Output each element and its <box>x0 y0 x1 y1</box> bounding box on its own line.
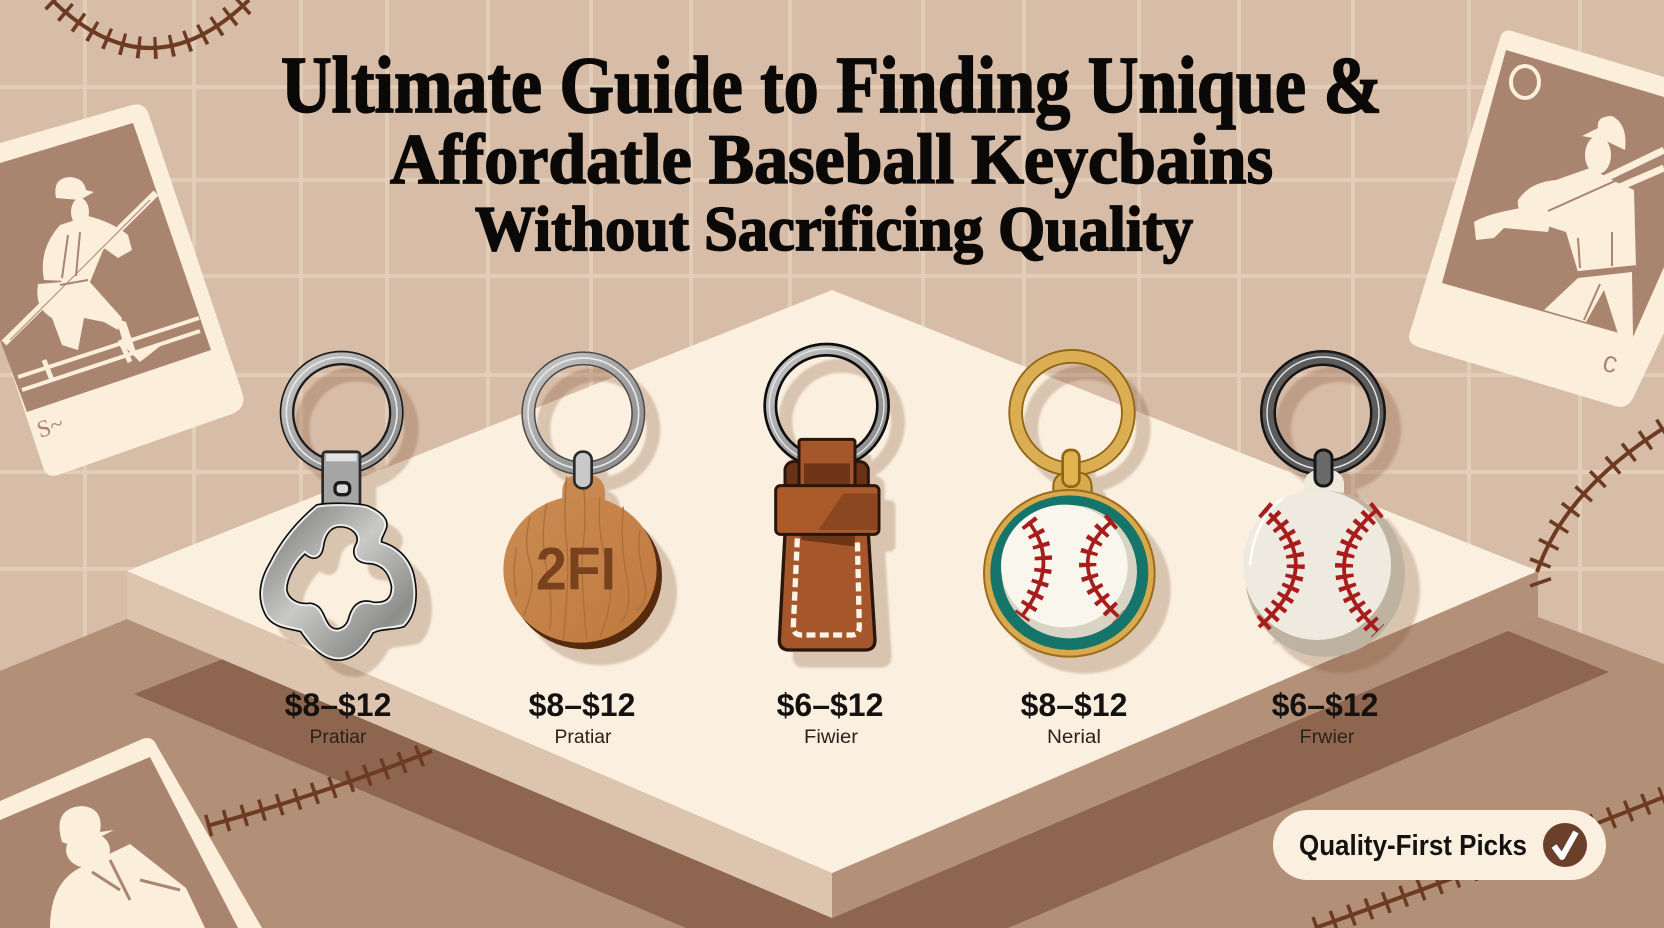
batter figure right <box>1474 116 1664 337</box>
keychain 5: plain baseball <box>1243 357 1405 657</box>
title: Ultimate Guide to Finding Unique & <box>281 42 1382 130</box>
metal clip <box>323 452 360 507</box>
check icon <box>1543 823 1587 867</box>
platform right side face <box>832 571 1538 918</box>
wood tab <box>562 475 605 503</box>
leather body <box>779 533 875 650</box>
platform left side face <box>127 571 832 918</box>
price 5: $6–$12 <box>1272 687 1378 723</box>
price 2: $8–$12 <box>529 687 635 723</box>
badge text: Quality-First Picks <box>1299 830 1527 862</box>
title <box>281 42 1382 264</box>
engraved text: 2FI <box>536 534 616 602</box>
ring clasp <box>574 452 592 488</box>
gold ring <box>1016 356 1128 469</box>
steel ring <box>528 358 639 469</box>
gold clasp <box>1063 450 1079 487</box>
leather band <box>776 486 879 534</box>
title: Without Sacrificing Quality <box>475 193 1193 264</box>
ball highlight <box>1001 505 1128 627</box>
disc face <box>503 496 657 643</box>
price 3: $6–$12 <box>777 687 883 723</box>
keychain 4: enamel baseball <box>984 356 1155 657</box>
green enamel ring <box>990 495 1148 650</box>
ring clasp <box>1315 450 1332 486</box>
baseball card right <box>1409 30 1664 407</box>
baseball card lower left <box>0 738 262 928</box>
keychain 1: steel bottle opener <box>262 357 414 658</box>
white ball <box>1002 505 1137 638</box>
keychain 2: wooden disc <box>503 358 662 649</box>
opener body <box>262 505 414 658</box>
price 1: $8–$12 <box>285 687 391 723</box>
floor shadow strip right <box>832 631 1609 928</box>
ball highlight <box>1250 498 1283 565</box>
platform top face <box>127 290 1538 873</box>
gunmetal ring <box>1267 357 1379 469</box>
ball face <box>1243 490 1391 640</box>
batter figure left <box>4 177 200 390</box>
card mark right: C <box>1599 352 1620 381</box>
disc edge <box>509 503 662 649</box>
keychain 3: leather strap <box>769 349 884 650</box>
ball mark <box>1511 66 1539 98</box>
leather upper strap <box>799 439 855 488</box>
red laces <box>1022 521 1118 617</box>
label 5: Frwier <box>1300 727 1355 748</box>
batter figure lower left <box>50 806 205 928</box>
seam stitches top left <box>52 0 249 48</box>
label 4: Nerial <box>1047 727 1101 748</box>
label 3: Fiwier <box>804 727 859 748</box>
baseball card left <box>0 104 244 476</box>
seam stitches lower left <box>207 751 432 826</box>
card mark left: S~ <box>34 411 67 444</box>
wood grain <box>514 477 646 640</box>
ground floor <box>0 617 1664 928</box>
quality badge <box>1273 810 1606 880</box>
ball shade <box>1245 491 1405 657</box>
label 1: Pratiar <box>310 727 367 748</box>
floor shadow strip left <box>134 659 832 928</box>
gold bezel <box>984 490 1155 657</box>
title: Affordatle Baseball Keycbains <box>390 121 1273 199</box>
white stitching <box>793 538 859 635</box>
label 2: Pratiar <box>554 727 612 748</box>
seam stitches lower right <box>1315 797 1664 928</box>
gold tab <box>1053 473 1092 493</box>
red laces <box>1259 509 1378 631</box>
ball neck <box>1304 470 1344 504</box>
price 4: $8–$12 <box>1021 687 1127 723</box>
steel ring <box>769 349 884 463</box>
seam stitches right <box>1537 428 1664 592</box>
leather back loop <box>785 462 868 495</box>
steel ring <box>286 357 397 468</box>
